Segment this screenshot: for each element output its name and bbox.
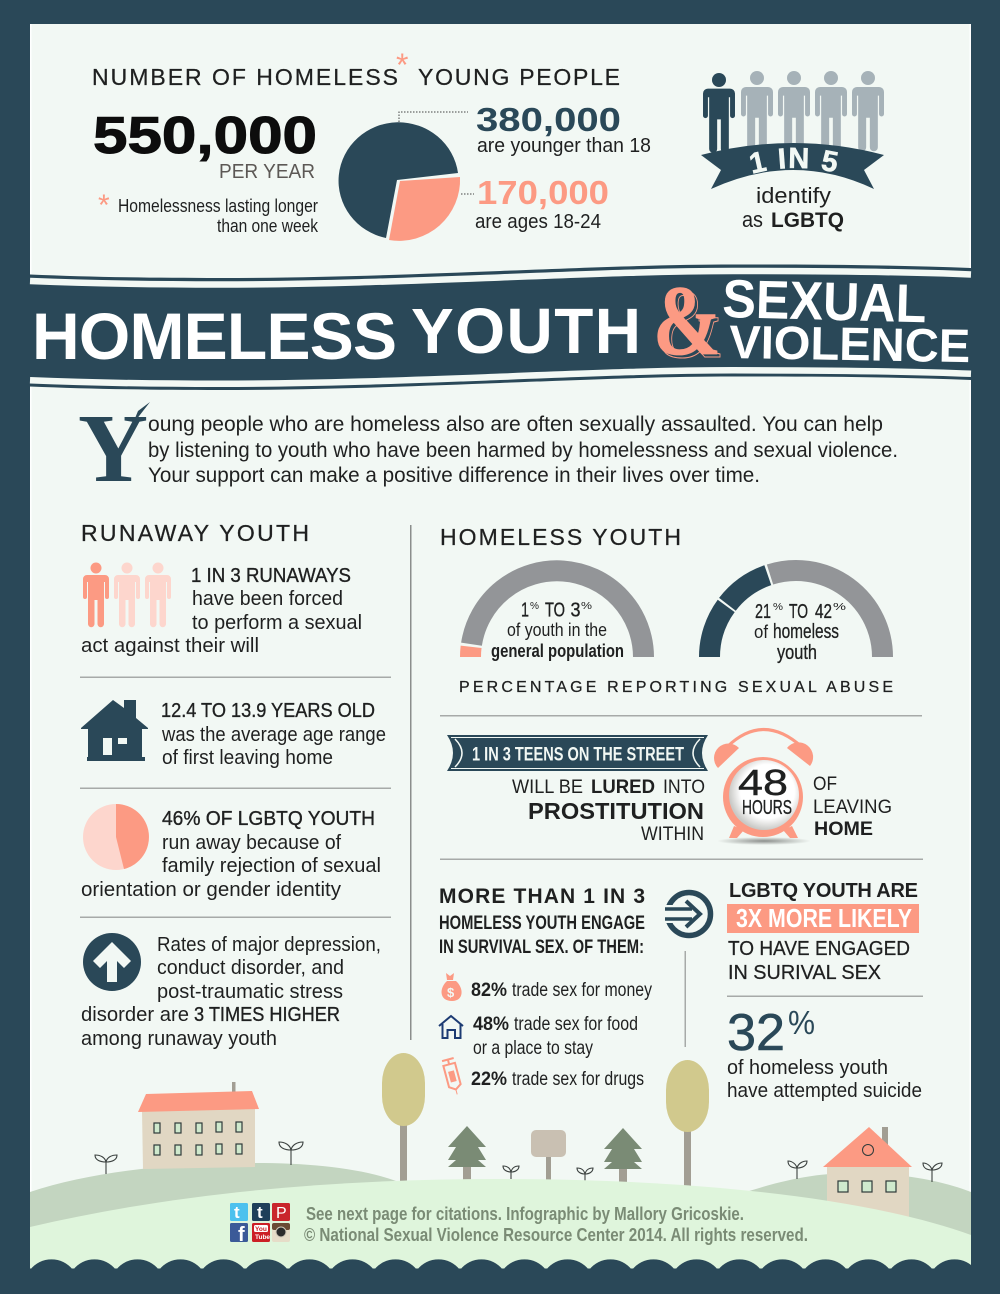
caption: identify as LGBTQ: identify	[756, 183, 831, 208]
ribbon: 1 in 5	[701, 143, 884, 189]
text: 1 in 3 runaways: to perform a sexual	[192, 612, 362, 634]
heading: number of homeless young people: *	[396, 47, 408, 83]
list: 48% food or a place to stay: trade sex for food	[514, 1014, 638, 1035]
list: 22% drugs: trade sex for drugs	[512, 1069, 644, 1090]
social media icons: P	[276, 1205, 287, 1222]
gauge: 1% to 3% of general population: %	[581, 601, 592, 612]
intro text	[148, 413, 898, 487]
gauge: 1% to 3% of general population: 3	[570, 600, 580, 622]
text: of leaving home: OF	[813, 774, 837, 795]
gauge: 21% to 42% of homeless youth	[709, 571, 882, 664]
stat: 170,000 ages 18-24: 170,000	[477, 174, 609, 211]
gauge: 21% to 42% of homeless youth: 21	[755, 601, 771, 623]
text: survival sex heading	[439, 885, 645, 958]
list: 82% money	[442, 973, 652, 1001]
list: 82% money: 82%	[471, 980, 507, 1001]
tree: pine left	[448, 1126, 486, 1181]
list: 22% drugs: 22%	[471, 1069, 507, 1090]
text: 1 in 3 runaways: act against their will	[81, 635, 259, 657]
text: lured into prostitution: PROSTITUTION	[528, 798, 704, 824]
panel: top statistics background	[30, 24, 971, 278]
caption: identify as LGBTQ: LGBTQ	[771, 209, 844, 232]
big number: 550,000 per year: 550,000	[93, 107, 317, 165]
title: homeless youth and sexual violence	[32, 265, 971, 379]
icon: up arrow circle	[83, 933, 141, 991]
heading: number of homeless young people	[92, 47, 620, 90]
gauge: 1% to 3% of general population: TO	[545, 600, 565, 622]
panel: runaway youth	[80, 520, 391, 1050]
text: rates of depression: disorder are	[81, 1004, 189, 1026]
text: lured into prostitution: WILL BE	[512, 777, 583, 798]
icon: three people	[83, 562, 171, 627]
heading: number of homeless young people: YOUNG PEOPLE	[418, 64, 620, 90]
footnote: homelessness definition	[98, 189, 319, 236]
intro text: Your support can make a positive difference in their lives over time.	[148, 464, 760, 487]
ribbon: 1 in 3 teens: 1 IN 3 TEENS ON THE STREET	[472, 744, 684, 766]
gauge: 21% to 42% of homeless youth: of	[754, 622, 769, 642]
gauge: 21% to 42% of homeless youth: %	[833, 602, 846, 613]
text: rates of depression	[81, 934, 381, 1050]
text: 46% of LGBTQ youth: run away because of	[162, 832, 341, 854]
list: 48% food or a place to stay: or a place to stay	[473, 1038, 593, 1059]
icon: money bag: $	[447, 985, 455, 1000]
social media icons: You	[255, 1226, 267, 1233]
footnote: homelessness definition: Homelessness lasting longer	[118, 196, 318, 216]
heading: number of homeless young people: NUMBER OF HOMELESS	[92, 64, 398, 90]
text: of leaving home: LEAVING	[813, 797, 892, 818]
icon: house	[81, 700, 148, 761]
ampersand: &	[656, 268, 724, 379]
back hills	[30, 1163, 971, 1240]
drop cap Y: Y	[78, 395, 148, 503]
stat: 32% attempted suicide: %	[788, 1004, 815, 1041]
text: 46% of LGBTQ youth: orientation or gender identity	[81, 879, 341, 901]
intro text: oung people who are homeless also are often sexually assaulted. You can help	[148, 413, 883, 436]
text: of leaving home	[813, 774, 892, 840]
section: number of homeless young people	[92, 47, 651, 241]
text: of leaving home: HOME	[814, 819, 873, 840]
text: survival sex heading: HOMELESS YOUTH ENGAGE	[439, 913, 645, 934]
ribbon: 1 in 5: 1 IN 5	[750, 148, 838, 174]
text: lured into prostitution	[512, 777, 705, 845]
text: 12.4 to 13.9 years old: of first leaving home	[162, 747, 333, 769]
tree: pine right	[604, 1128, 642, 1185]
text: 12.4 to 13.9 years old: 12.4 TO 13.9 YEARS OLD	[161, 700, 375, 722]
banner stripe: lower	[30, 370, 971, 384]
list: 82% money: trade sex for money	[512, 980, 652, 1001]
icon: alarm clock 48 hours	[714, 730, 813, 845]
credits: See next page for citations. Infographic by Mallory Gricoskie.	[306, 1204, 744, 1224]
footnote: homelessness definition: *	[98, 189, 110, 222]
text: rates of depression: 3 TIMES HIGHER	[194, 1004, 340, 1026]
social media icons: f	[238, 1224, 245, 1246]
title: homeless youth and sexual violence: VIOLENCE	[729, 315, 971, 372]
signpost	[531, 1130, 566, 1181]
text: lured into prostitution: LURED	[591, 777, 655, 798]
social media icons	[230, 1203, 290, 1246]
text: survival sex heading: MORE THAN 1 IN 3	[439, 885, 645, 908]
caption: identify as LGBTQ: as	[742, 207, 763, 232]
title: homeless youth and sexual violence: SEXUAL	[722, 269, 927, 334]
text: survival sex heading: IN SURVIVAL SEX. OF THEM:	[439, 937, 644, 958]
gauge: 1% to 3% of general population: of youth in the	[507, 620, 607, 640]
social media icons: t	[234, 1203, 240, 1222]
text: rates of depression: Rates of major depression,	[157, 934, 381, 956]
text: 12.4 to 13.9 years old	[161, 700, 386, 769]
gauge: 1% to 3% of general population	[470, 571, 644, 661]
icon: syringe	[442, 1058, 463, 1096]
gauge: 21% to 42% of homeless youth: 42	[815, 601, 832, 623]
building: large house	[138, 1082, 259, 1169]
text: 46% of LGBTQ youth: family rejection of sexual	[162, 855, 381, 877]
callout: LGBTQ youth 3x more likely: LGBTQ YOUTH ARE	[729, 880, 918, 902]
ampersand: &	[653, 265, 721, 376]
stat: 380,000 younger than 18	[476, 101, 651, 157]
caption: identify as LGBTQ	[742, 183, 844, 232]
list: 48% food or a place to stay: 48%	[473, 1014, 509, 1035]
text: 46% of LGBTQ youth	[81, 808, 381, 901]
pie chart: age split	[339, 112, 474, 241]
panel: main content background	[30, 376, 971, 1269]
big number: 550,000 per year: PER YEAR	[219, 161, 315, 183]
footnote: homelessness definition: than one week	[217, 216, 319, 236]
text: lured into prostitution: INTO	[663, 777, 705, 798]
gauge: 21% to 42% of homeless youth: homeless	[773, 621, 839, 643]
callout: LGBTQ youth 3x more likely: 3X MORE LIKELY	[736, 903, 912, 933]
icon: house outline	[439, 1016, 463, 1038]
stat block: 1 in 3 runaways	[81, 562, 362, 657]
text: 1 in 3 runaways: have been forced	[192, 588, 343, 610]
tree: right	[666, 1060, 709, 1189]
heading: homeless youth: HOMELESS YOUTH	[440, 524, 681, 550]
big number: 550,000 per year	[93, 107, 317, 183]
intro paragraph with drop cap	[78, 395, 898, 503]
text: 1 in 3 runaways	[81, 565, 362, 657]
stat: 380,000 younger than 18: are younger than 18	[477, 135, 651, 157]
list: 22% drugs	[442, 1058, 644, 1096]
stat: 32% attempted suicide: have attempted suicide	[727, 1080, 922, 1102]
heading: runaway youth: RUNAWAY YOUTH	[81, 520, 309, 546]
callout: LGBTQ youth 3x more likely: IN SURIVAL SEX	[728, 962, 881, 984]
title: homeless youth and sexual violence: YOUTH	[411, 295, 641, 367]
gauge: 21% to 42% of homeless youth: TO	[789, 601, 808, 623]
illustration: landscape	[30, 1053, 971, 1269]
text: rates of depression: among runaway youth	[81, 1028, 277, 1050]
intro text: by listening to youth who have been harmed by homelessness and sexual violence.	[148, 439, 898, 462]
stat: 32% attempted suicide: 32	[727, 1004, 785, 1062]
stat: 170,000 ages 18-24: are ages 18-24	[475, 211, 601, 233]
gauge: 1% to 3% of general population: general population	[491, 641, 624, 661]
icon: alarm clock 48 hours: HOURS	[742, 797, 792, 819]
stat: 380,000 younger than 18: 380,000	[476, 101, 621, 138]
building: small house	[823, 1127, 912, 1221]
icon: money bag	[442, 973, 462, 1001]
callout: LGBTQ youth 3x more likely: TO HAVE ENGAGED	[728, 938, 910, 960]
text: rates of depression: conduct disorder, and	[157, 957, 344, 979]
stat: 32% attempted suicide	[727, 1004, 922, 1102]
credits: © National Sexual Violence Resource Center 2014. All rights reserved.	[304, 1225, 808, 1245]
stat block: 46% of LGBTQ youth	[81, 804, 381, 901]
text: 12.4 to 13.9 years old: was the average age range	[161, 724, 386, 746]
gauge caption: PERCENTAGE REPORTING SEXUAL ABUSE	[459, 679, 893, 696]
stat block: average age	[81, 700, 386, 769]
text: 1 in 3 runaways: 1 IN 3 RUNAWAYS	[191, 565, 351, 587]
text: lured into prostitution: WITHIN	[641, 824, 704, 845]
panel: homeless youth	[439, 524, 923, 1102]
gauge: 21% to 42% of homeless youth: %	[773, 602, 783, 613]
social media icons: t	[257, 1203, 263, 1222]
icon: alarm clock 48 hours: 48	[738, 762, 788, 803]
pictogram: 1 in 5 identify as LGBTQ	[701, 71, 884, 232]
credits	[304, 1204, 808, 1245]
gauge: 1% to 3% of general population: 1	[521, 600, 529, 622]
sprouts	[95, 1142, 942, 1182]
front hill	[30, 1179, 971, 1269]
banner stripe: upper	[30, 271, 971, 284]
stat block: 3 times higher	[81, 933, 381, 1050]
title: homeless youth and sexual violence: HOMELESS	[32, 299, 397, 373]
list: 48% food or a place to stay	[439, 1014, 638, 1059]
ribbon: 1 in 3 teens	[447, 735, 708, 771]
icon: circled right arrow	[661, 892, 710, 936]
stat: 32% attempted suicide: of homeless youth	[727, 1057, 888, 1079]
icon: five people	[703, 71, 884, 153]
gauge: 1% to 3% of general population: %	[530, 601, 539, 612]
gauge: 21% to 42% of homeless youth: youth	[777, 642, 817, 664]
text: rates of depression: post-traumatic stress	[157, 981, 343, 1003]
tree: left	[382, 1053, 425, 1182]
text: 46% of LGBTQ youth: 46% OF LGBTQ YOUTH	[162, 808, 375, 830]
stat: 170,000 ages 18-24	[475, 174, 609, 233]
callout: LGBTQ youth 3x more likely	[727, 880, 919, 984]
social media icons: Tube	[255, 1234, 270, 1241]
icon: small pie chart	[83, 804, 149, 870]
